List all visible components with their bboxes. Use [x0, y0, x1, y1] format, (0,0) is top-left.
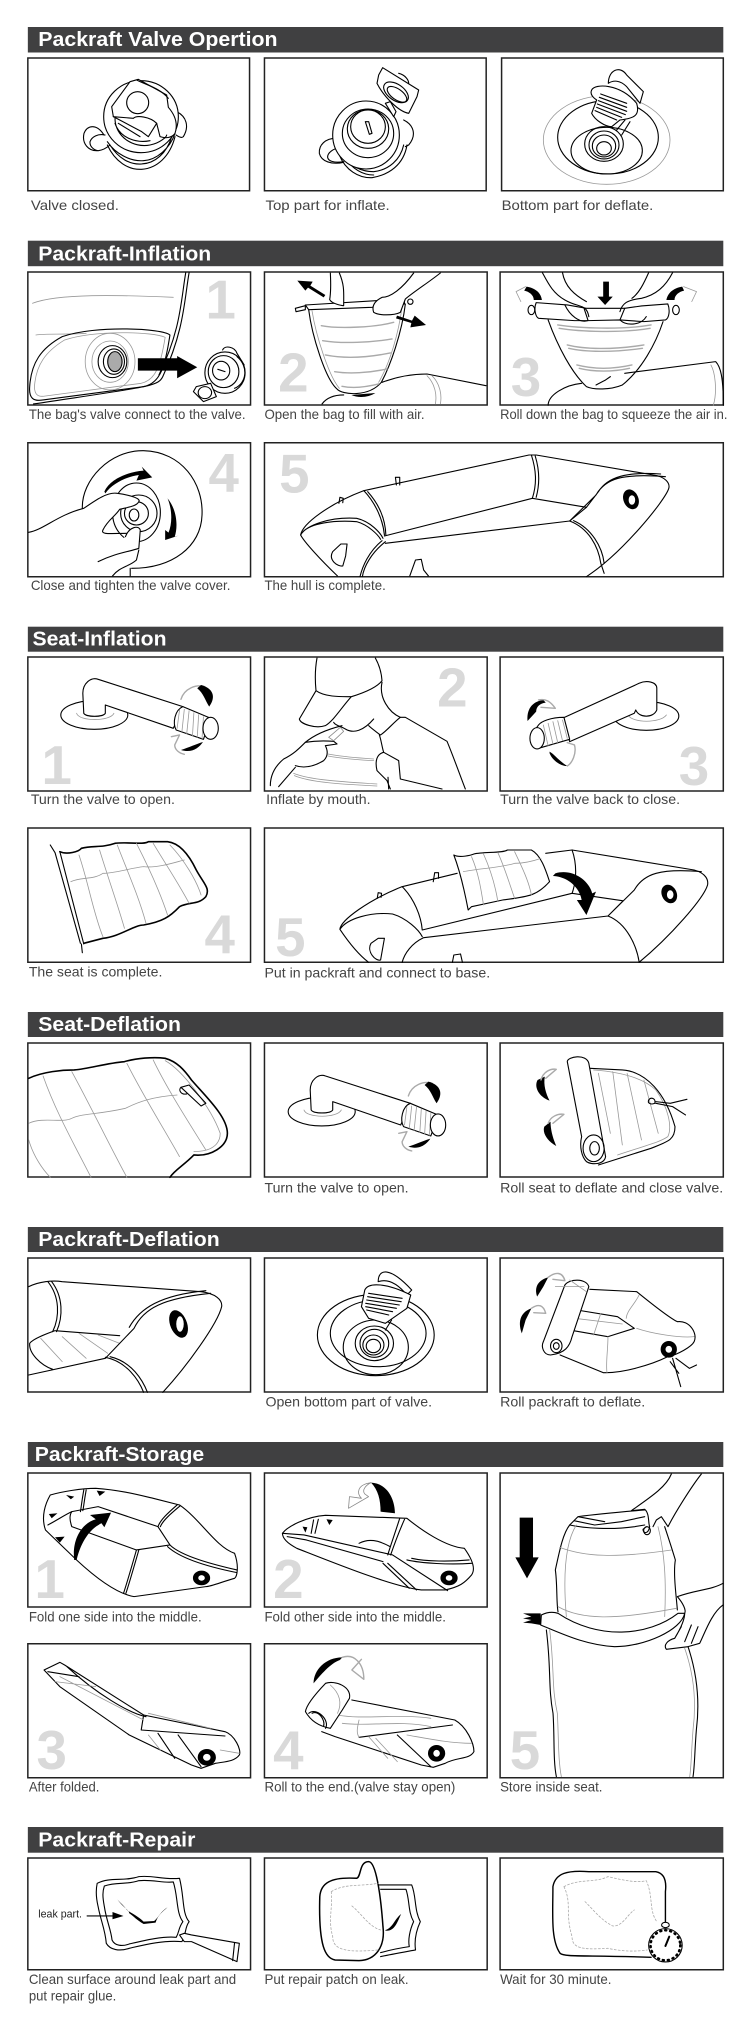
panel: step 4 roll to the end — [264, 1644, 487, 1781]
section: packraft deflation — [28, 1227, 723, 1410]
illustration: leak and glue tube — [87, 1876, 239, 1962]
illustration: folded raft — [44, 1662, 240, 1768]
heading: Packraft-Inflation: Packraft-Inflation — [38, 243, 211, 266]
section: packraft repair — [28, 1827, 723, 2003]
panel: step 4 tighten valve cover — [28, 442, 251, 577]
caption: Fold one side into the middle. — [29, 1609, 202, 1625]
illustration: seat placed in hull — [340, 850, 708, 962]
heading: Packraft-Storage — [28, 1442, 723, 1467]
number 4: 4 — [208, 442, 239, 504]
heading: Packraft-Inflation — [28, 241, 723, 266]
panel: bottom part for deflate — [502, 58, 723, 191]
illustration: rolling bag — [516, 273, 723, 405]
caption: Roll to the end.(valve stay open) — [264, 1779, 455, 1795]
heading: Packraft-Deflation — [28, 1227, 723, 1252]
caption line 2: put repair glue. — [29, 1987, 116, 2003]
number 1: 1 — [41, 734, 72, 796]
caption: The seat is complete. — [29, 964, 162, 980]
illustration: valve and arrow — [30, 273, 245, 404]
illustration: open bag — [295, 273, 486, 404]
illustration: inflated hull — [301, 455, 669, 577]
section: packraft valve operation — [28, 27, 723, 213]
heading: Packraft Valve Opertion — [28, 27, 723, 52]
heading: Seat-Deflation: Seat-Deflation — [38, 1014, 181, 1036]
number 3: 3 — [679, 735, 709, 797]
number 5: 5 — [510, 1719, 540, 1781]
section: packraft storage — [28, 1442, 723, 1795]
illustration: patch and stopwatch — [553, 1871, 682, 1962]
number 4: 4 — [273, 1719, 304, 1781]
caption: Store inside seat. — [500, 1779, 603, 1795]
illustration: person inflating seat — [270, 658, 465, 789]
number 2: 2 — [437, 657, 468, 719]
heading: Seat-Inflation: Seat-Inflation — [33, 629, 167, 651]
panel: wait 30 minutes — [500, 1858, 723, 1970]
caption: Clean surface around leak part and — [29, 1971, 236, 1987]
panel: seat valve close-up — [28, 1043, 251, 1177]
heading: Seat-Deflation — [28, 1012, 723, 1037]
section: seat deflation — [28, 1012, 723, 1196]
panel: step 2 inflate by mouth — [264, 657, 487, 791]
number 2: 2 — [273, 1548, 304, 1610]
panel: step 1 fold one side — [28, 1473, 251, 1610]
heading: Packraft Valve Opertion: Packraft Valve Opertion — [38, 29, 278, 51]
caption: Turn the valve to open. — [31, 791, 175, 807]
number 3: 3 — [36, 1719, 67, 1781]
caption: Inflate by mouth. — [266, 791, 371, 807]
heading: Packraft-Repair — [28, 1827, 723, 1853]
panel: packraft valve close-up — [28, 1258, 251, 1392]
number 1: 1 — [35, 1548, 65, 1610]
caption: Roll down the bag to squeeze the air in. — [500, 406, 727, 422]
number 1: 1 — [206, 268, 236, 331]
panel: step 5 put in packraft — [264, 828, 723, 968]
panel: step 1 turn valve — [28, 657, 251, 796]
section: packraft inflation — [28, 241, 727, 593]
illustration: hand tightening — [29, 451, 202, 576]
caption: Roll packraft to deflate. — [500, 1394, 645, 1410]
illustration: seat valve — [61, 679, 218, 754]
panel: clean leak and glue — [28, 1858, 251, 1970]
panel: step 2 open the bag — [264, 272, 487, 405]
section: seat inflation — [28, 627, 723, 981]
caption: Wait for 30 minute. — [500, 1971, 611, 1987]
panel: valve closed — [28, 58, 250, 191]
illustration: rolled raft — [305, 1656, 474, 1767]
illustration: fold one side — [43, 1488, 237, 1597]
number 5: 5 — [275, 906, 306, 968]
panel: top part for inflate — [264, 58, 486, 191]
panel: roll seat — [500, 1043, 723, 1177]
number 5: 5 — [279, 443, 309, 505]
number 2: 2 — [278, 341, 309, 404]
panel: step 2 fold other side — [264, 1473, 487, 1610]
number 4: 4 — [205, 903, 235, 965]
caption: Turn the valve back to close. — [500, 791, 680, 807]
caption: Fold other side into the middle. — [264, 1609, 446, 1625]
caption: Open bottom part of valve. — [265, 1394, 432, 1410]
heading: Packraft-Repair: Packraft-Repair — [38, 1830, 196, 1852]
panel: step 5 hull complete — [264, 443, 723, 577]
panel: step 1 connect bag valve — [28, 268, 251, 405]
heading: Seat-Inflation — [28, 627, 723, 652]
panel: roll packraft — [500, 1258, 723, 1392]
number 3: 3 — [511, 346, 541, 408]
caption: Open the bag to fill with air. — [264, 406, 425, 422]
caption: Put repair patch on leak. — [264, 1971, 409, 1987]
caption: Bottom part for deflate. — [502, 197, 653, 213]
panel: step 4 seat complete — [28, 828, 251, 965]
caption: Top part for inflate. — [265, 197, 390, 213]
panel: step 5 store inside seat — [500, 1473, 723, 1781]
caption: Valve closed. — [31, 197, 119, 213]
panel: step 3 after folded — [28, 1644, 251, 1781]
panel: turn valve open — [264, 1043, 487, 1177]
caption: The hull is complete. — [264, 577, 386, 593]
caption: Put in packraft and connect to base. — [264, 965, 490, 981]
illustration: seat valve mirrored — [527, 682, 679, 766]
caption: Roll seat to deflate and close valve. — [500, 1180, 723, 1196]
caption: Close and tighten the valve cover. — [31, 577, 230, 593]
panel: open bottom part — [264, 1258, 487, 1392]
heading: Packraft-Deflation: Packraft-Deflation — [38, 1229, 220, 1251]
panel: put repair patch — [264, 1858, 487, 1970]
caption: After folded. — [29, 1779, 99, 1795]
label: leak part: leak part. — [38, 1909, 82, 1921]
illustration: packing raft into seat — [515, 1474, 723, 1777]
panel: step 3 roll down the bag — [500, 272, 723, 408]
heading: Packraft-Storage: Packraft-Storage — [35, 1444, 204, 1466]
caption: The bag's valve connect to the valve. — [29, 406, 246, 422]
illustration: inflated seat — [50, 842, 207, 953]
caption: Turn the valve to open. — [264, 1180, 409, 1196]
illustration: fold other side — [282, 1483, 473, 1591]
panel: step 3 close valve — [500, 657, 723, 797]
